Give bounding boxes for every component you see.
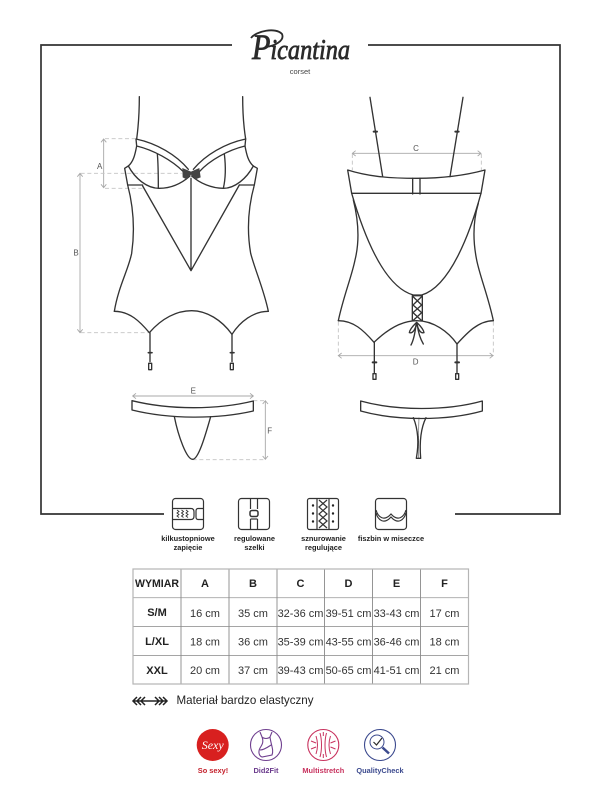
badge: did2fit (250, 730, 282, 775)
dimension D: D (413, 357, 419, 366)
badge: quality check (356, 730, 404, 775)
row XXL: XXL (146, 665, 168, 677)
icon: adjustable lacing (301, 498, 346, 552)
dimension F: F (267, 427, 272, 436)
row XXL: 37 cm (238, 665, 268, 677)
row S/M: 39-51 cm (326, 608, 371, 620)
icon: stretch arrow (133, 697, 167, 705)
front view of corset (73, 97, 268, 370)
header row: E (393, 578, 400, 590)
dimension B (73, 173, 182, 333)
row L/XL: 43-55 cm (326, 636, 371, 648)
back view of corset (338, 97, 493, 379)
badge: quality check: QualityCheck (356, 766, 404, 775)
dimension B: B (73, 249, 79, 258)
row XXL: 41-51 cm (374, 665, 419, 677)
header row: B (249, 578, 257, 590)
icon: multi-step closure: kilkustopniowe (161, 534, 215, 543)
dimension E: E (191, 387, 196, 396)
dimension F (193, 401, 272, 460)
header row: A (201, 578, 209, 590)
icon: adjustable straps: szelki (244, 543, 265, 552)
thong outline (132, 401, 253, 459)
header row: D (345, 578, 353, 590)
icon: underwire in cups (358, 498, 424, 543)
row S/M: 35 cm (238, 608, 268, 620)
row XXL: 21 cm (430, 665, 459, 677)
stretch material text: Materiał bardzo elastyczny (176, 693, 314, 707)
row S/M: S/M (147, 607, 167, 619)
badge: multistretch (302, 730, 345, 775)
header row: WYMIAR (135, 578, 179, 590)
row S/M: 33-43 cm (374, 608, 419, 620)
dimension A (97, 139, 143, 188)
dimension C: C (413, 144, 419, 153)
badge: so sexy (197, 729, 229, 775)
quality badges (197, 729, 404, 775)
dimension D (338, 322, 493, 366)
icon: multi-step closure (161, 498, 215, 552)
front thong (132, 387, 272, 460)
dimension E (133, 387, 253, 399)
frame border (41, 45, 560, 514)
row XXL (146, 665, 459, 677)
icon: adjustable lacing: sznurowanie (301, 534, 346, 543)
front outline (114, 97, 268, 370)
icon: adjustable straps: regulowane (234, 534, 275, 543)
feature icons row (161, 498, 424, 552)
row S/M: 17 cm (430, 608, 459, 620)
header row: C (297, 578, 305, 590)
row XXL: 50-65 cm (326, 665, 371, 677)
row L/XL (145, 636, 459, 648)
badge: multistretch: Multistretch (302, 766, 345, 775)
row L/XL: 36-46 cm (374, 636, 419, 648)
bow (182, 168, 201, 179)
icon: adjustable lacing: regulujące (305, 543, 342, 552)
dimension A: A (97, 162, 103, 171)
header row: F (441, 578, 448, 590)
icon: underwire in cups: fiszbin w miseczce (358, 534, 424, 543)
badge: did2fit: Did2Fit (253, 766, 279, 775)
size table (133, 569, 468, 684)
badge: so sexy: Sexy (202, 738, 224, 752)
title: brand logo: Picantina (251, 27, 350, 67)
row S/M (147, 607, 459, 620)
subtitle: corset (290, 67, 311, 76)
row L/XL: 18 cm (430, 636, 459, 648)
row XXL: 39-43 cm (278, 665, 323, 677)
dimension C (352, 144, 481, 170)
icon: adjustable straps (234, 498, 275, 552)
icon: multi-step closure: zapięcie (174, 543, 202, 552)
table grid (133, 569, 468, 684)
back thong (361, 401, 482, 458)
row L/XL: 36 cm (238, 636, 268, 648)
row L/XL: L/XL (145, 636, 169, 648)
row XXL: 20 cm (190, 665, 220, 677)
badge: so sexy: So sexy! (198, 766, 228, 775)
header row (135, 578, 448, 590)
back outline (338, 97, 493, 379)
row S/M: 32-36 cm (278, 608, 323, 620)
row L/XL: 18 cm (190, 636, 220, 648)
row L/XL: 35-39 cm (278, 636, 323, 648)
row S/M: 16 cm (190, 608, 220, 620)
